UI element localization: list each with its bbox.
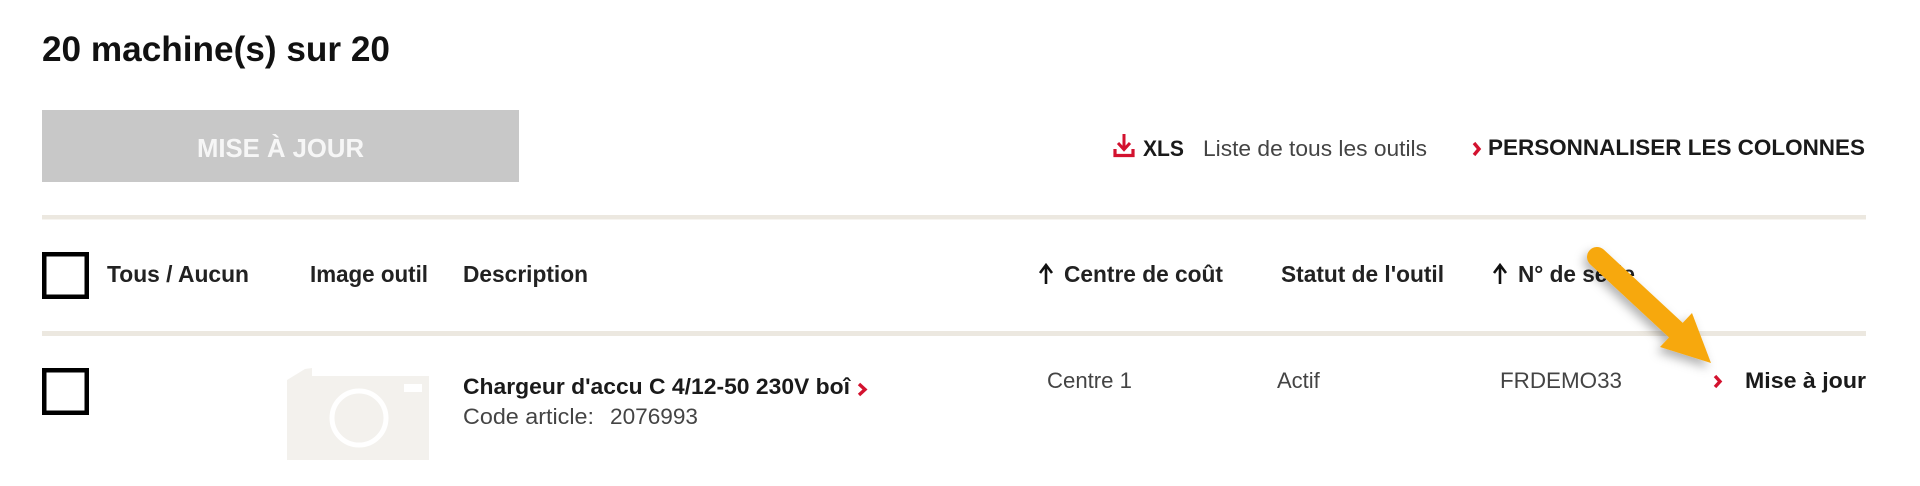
link: personnaliser les colonnes: PERSONNALISER LES COLONNES — [1488, 135, 1865, 160]
title: 20 machine(s) sur 20 — [42, 30, 390, 69]
table row: Centre 1 — [1047, 368, 1132, 393]
icon: camera placeholder — [287, 368, 429, 460]
description text: Code article: — [463, 404, 594, 429]
description text — [463, 374, 865, 429]
checkbox: row — [44, 370, 87, 413]
XLS export link — [1115, 134, 1427, 161]
table row: FRDEMO33 — [1500, 368, 1622, 393]
checkbox: tous / aucun — [44, 254, 87, 297]
button: mise à jour — [42, 110, 519, 182]
arrow: annotation pointing to mise à jour — [1597, 257, 1711, 363]
icon: download — [1115, 134, 1133, 156]
table header: Centre de coût — [1064, 261, 1223, 287]
XLS export link: Liste de tous les outils — [1203, 136, 1427, 161]
link: mise à jour: Mise à jour — [1745, 368, 1866, 393]
table header: Image outil — [310, 261, 428, 287]
table row: Actif — [1277, 368, 1321, 393]
table header: Tous / Aucun — [107, 261, 249, 287]
table row — [44, 368, 1866, 460]
table header: Description — [463, 261, 588, 287]
table header — [44, 254, 1635, 297]
table header: N° de série — [1518, 261, 1635, 287]
description text: 2076993 — [610, 404, 698, 429]
icon: sort arrow — [1494, 265, 1506, 284]
table header: Statut de l'outil — [1281, 261, 1444, 287]
description text: Chargeur d'accu C 4/12-50 230V boî — [463, 374, 852, 399]
button: mise à jour: MISE À JOUR — [197, 133, 364, 163]
XLS export link: XLS — [1143, 136, 1184, 161]
icon: sort arrow — [1040, 265, 1052, 284]
